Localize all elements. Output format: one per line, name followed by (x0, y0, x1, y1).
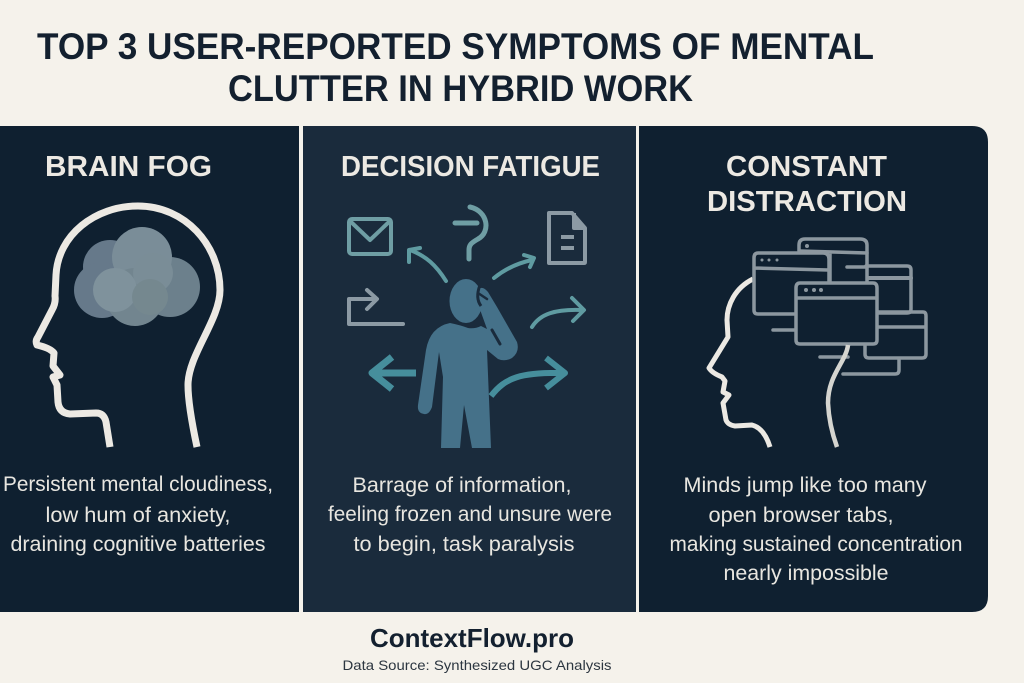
description: constant distraction: making sustained concentration (670, 533, 962, 556)
heading: brain fog: BRAIN FOG (45, 151, 212, 183)
description: brain fog: low hum of anxiety, (46, 504, 230, 527)
heading: constant distraction: DISTRACTION (707, 186, 907, 218)
description: brain fog: Persistent mental cloudiness, (3, 473, 273, 496)
arrow: curved right (491, 358, 565, 396)
icon: head back line (828, 345, 848, 447)
description: decision fatigue (328, 474, 612, 556)
heading: constant distraction (707, 151, 907, 218)
icon: question mark (455, 207, 486, 259)
description: decision fatigue: Barrage of information, (352, 474, 572, 497)
panel: constant distraction (639, 126, 988, 612)
icon: return arrow (349, 290, 403, 324)
description: constant distraction (670, 474, 962, 585)
title: TOP 3 USER-REPORTED SYMPTOMS OF MENTAL (37, 26, 874, 67)
icon: envelope (349, 219, 391, 254)
description: decision fatigue: to begin, task paralysis (354, 533, 574, 556)
brand name: ContextFlow.pro (370, 623, 574, 653)
description: constant distraction: nearly impossible (724, 562, 888, 585)
description: constant distraction: open browser tabs, (708, 504, 894, 527)
description: brain fog (3, 473, 273, 556)
panel: decision fatigue (303, 126, 636, 612)
icon: head outline (709, 279, 770, 447)
description: decision fatigue: feeling frozen and unsure were (328, 503, 612, 526)
data source: Data Source: Synthesized UGC Analysis (342, 657, 612, 673)
title: CLUTTER IN HYBRID WORK (228, 68, 693, 109)
title (37, 26, 874, 109)
heading: decision fatigue: DECISION FATIGUE (341, 151, 600, 183)
icon: browser windows (754, 239, 926, 374)
description: constant distraction: Minds jump like too many (684, 474, 927, 497)
icon: head with fog cloud (36, 206, 220, 447)
icon: confused person (418, 279, 518, 448)
description: brain fog: draining cognitive batteries (10, 533, 266, 556)
heading: constant distraction: CONSTANT (726, 151, 887, 183)
arrow: left (372, 357, 416, 389)
panel: brain fog (0, 126, 299, 612)
icon: window dots (760, 244, 823, 292)
icon: document (549, 213, 585, 263)
arrows: curved thought arrows (409, 248, 584, 327)
